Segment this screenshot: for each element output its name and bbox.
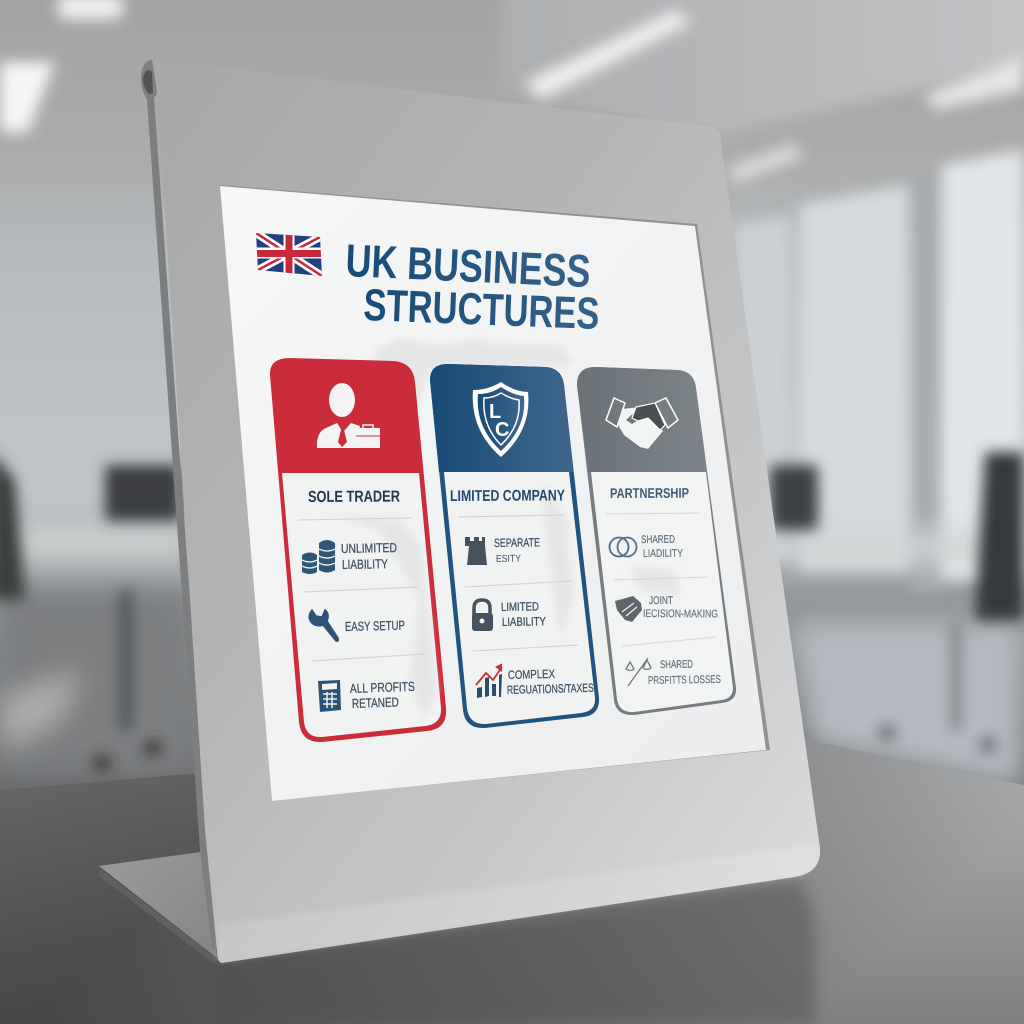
- item: shared profits and losses: PRSFITTS LOSSES: [648, 674, 721, 687]
- icon: handshake: [606, 398, 678, 449]
- item: all profits retained: [350, 679, 415, 711]
- icon: UK flag: [256, 233, 322, 276]
- bottom curve highlight: [216, 845, 816, 963]
- icon: wrench: [309, 610, 338, 641]
- title: UK BUSINESS: [345, 234, 592, 297]
- heading: partnership: PARTNERSHIP: [610, 485, 689, 501]
- item: joint decision-making: IECISION-MAKING: [643, 608, 718, 620]
- item: separate entity: SEPARATE: [494, 535, 540, 550]
- title: [345, 234, 600, 339]
- icon: small handshake: [615, 596, 642, 622]
- icon: calculator: [318, 680, 341, 712]
- stand face: [152, 59, 820, 963]
- icon: LC shield: C: [495, 419, 509, 441]
- heading: sole trader: SOLE TRADER: [308, 489, 400, 506]
- item: shared liability: SHARED: [641, 534, 675, 546]
- item: unlimited liability: UNLIMITED: [341, 540, 397, 556]
- panel: sole trader: [270, 358, 446, 742]
- item: limited liability: [501, 599, 546, 629]
- item: joint decision-making: JOINT: [649, 595, 673, 607]
- icon: person with briefcase: [317, 383, 380, 448]
- faint map blotch: sole trader: [335, 515, 437, 720]
- item: limited liability: LIMITED: [501, 599, 539, 614]
- item: shared liability: LIADILITY: [643, 548, 684, 560]
- printed panel: [220, 185, 770, 801]
- panel: partnership: [577, 367, 736, 715]
- item: joint decision-making: [643, 595, 718, 620]
- faint map blotch: limited company: [540, 480, 573, 640]
- panel: limited company: [430, 364, 599, 728]
- faint map blotch: partnership: [630, 565, 680, 595]
- item: complex regulations: [507, 667, 594, 697]
- icon: rising bar chart: [476, 665, 502, 698]
- item: shared profits and losses: SHARED: [660, 659, 693, 671]
- desk surface: [0, 740, 1024, 1024]
- item: complex regulations: REGUATIONS/TAXES: [507, 681, 594, 697]
- item: limited liability: LIABILITY: [502, 614, 546, 629]
- item: shared liability: [641, 534, 684, 560]
- item: easy setup: EASY SETUP: [345, 618, 405, 634]
- icon: LC shield: L: [489, 401, 501, 423]
- item: unlimited liability: [341, 540, 397, 572]
- item: shared profits and losses: [648, 659, 721, 687]
- item: all profits retained: RETANED: [352, 694, 399, 711]
- title: STRUCTURES: [363, 279, 600, 339]
- stand foot: [99, 851, 217, 958]
- item: separate entity: ESITY: [496, 554, 521, 565]
- stand back edge: [141, 59, 220, 950]
- heading: limited company: LIMITED COMPANY: [450, 487, 566, 505]
- item: separate entity: [494, 535, 540, 565]
- icon: castle tower: [465, 537, 487, 565]
- faint UK map watermark: [375, 338, 575, 420]
- icon: LC shield: [473, 382, 528, 457]
- item: all profits retained: ALL PROFITS: [350, 679, 415, 696]
- icon: linked rings: [610, 538, 636, 556]
- item: complex regulations: COMPLEX: [508, 667, 555, 682]
- item: unlimited liability: LIABILITY: [342, 556, 388, 572]
- rolled top lip: [143, 70, 153, 94]
- icon: coins: [302, 540, 335, 574]
- icon: padlock: [472, 600, 493, 631]
- acrylic sign stand: [99, 59, 820, 963]
- icon: balance scale: [626, 658, 651, 686]
